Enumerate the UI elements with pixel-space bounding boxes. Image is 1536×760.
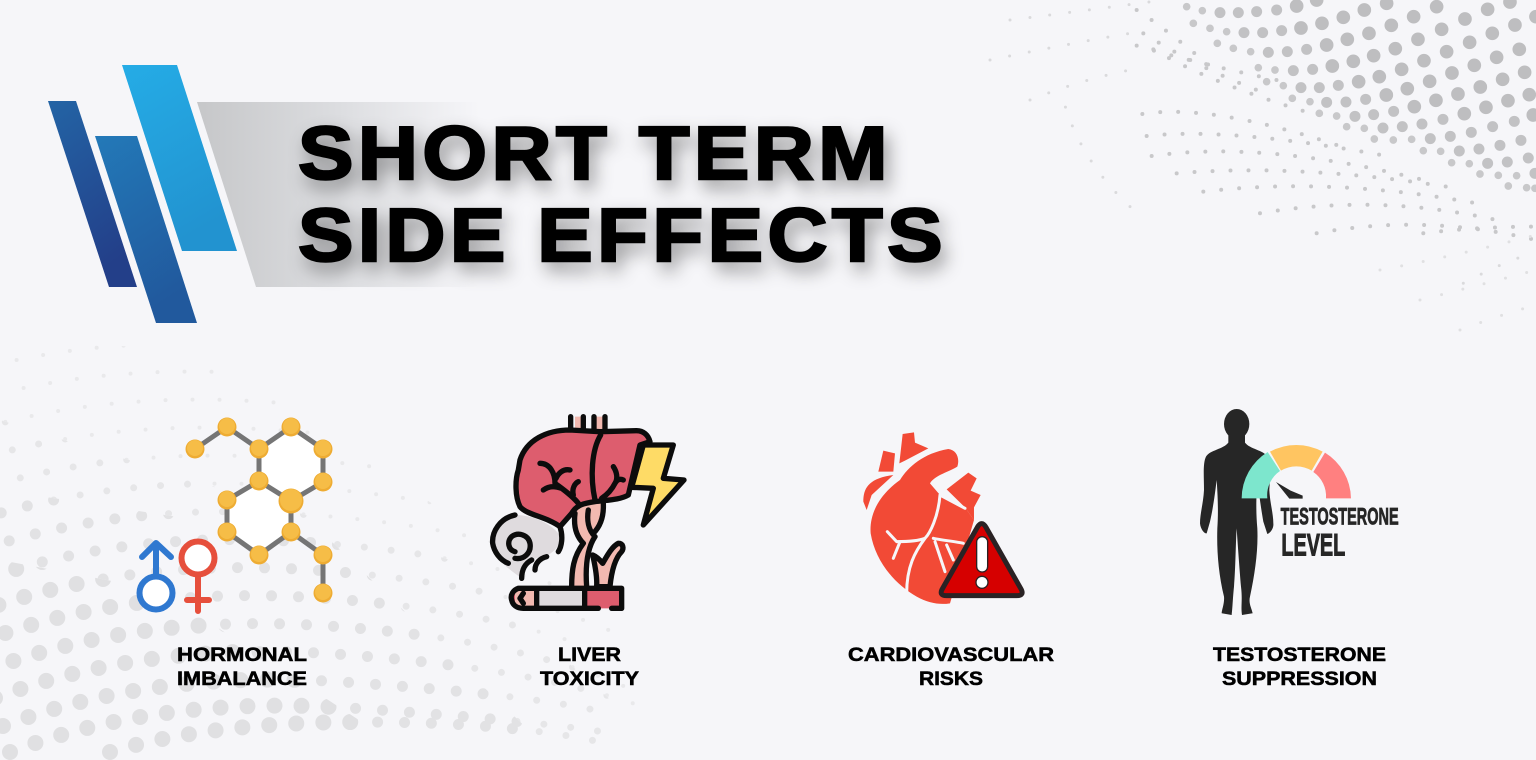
gauge label: TESTOSTERONE bbox=[1281, 504, 1399, 531]
label: testosterone suppression: SUPPRESSION bbox=[1222, 668, 1377, 690]
background: faint dots lower right of top pattern bbox=[1380, 235, 1536, 330]
label: testosterone suppression bbox=[1213, 644, 1386, 690]
label: testosterone suppression: TESTOSTERONE bbox=[1213, 644, 1386, 666]
label: liver toxicity bbox=[540, 644, 639, 690]
label: cardiovascular risks: RISKS bbox=[919, 668, 983, 690]
label: cardiovascular risks: CARDIOVASCULAR bbox=[848, 644, 1054, 666]
title: SHORT TERM bbox=[298, 111, 892, 195]
label: hormonal imbalance: HORMONAL bbox=[177, 644, 307, 666]
logo: three slanted blue bars bbox=[48, 65, 237, 323]
icon: body silhouette with testosterone gauge: LEVEL bbox=[1281, 528, 1345, 563]
icon: body silhouette with testosterone gauge bbox=[1200, 409, 1399, 615]
label: liver toxicity: TOXICITY bbox=[540, 668, 639, 690]
icon: male symbol bbox=[140, 543, 172, 610]
icon: heart with warning triangle bbox=[863, 432, 1022, 604]
title: SIDE EFFECTS bbox=[298, 193, 947, 277]
background: halftone dots top right bbox=[990, 0, 1536, 283]
title bbox=[298, 111, 947, 277]
background: halftone dots bottom left bbox=[0, 346, 634, 760]
icon: female symbol bbox=[182, 542, 214, 611]
label: hormonal imbalance bbox=[177, 644, 307, 690]
icon: warning triangle bbox=[941, 524, 1022, 596]
label: hormonal imbalance: IMBALANCE bbox=[177, 668, 307, 690]
icon: molecule with gender symbols bbox=[140, 418, 332, 611]
label: liver toxicity: LIVER bbox=[558, 644, 621, 666]
icon: liver with cigarette, smoke and lightning bbox=[493, 417, 684, 608]
label: cardiovascular risks bbox=[848, 644, 1054, 690]
title banner: grey gradient band bbox=[197, 102, 480, 287]
